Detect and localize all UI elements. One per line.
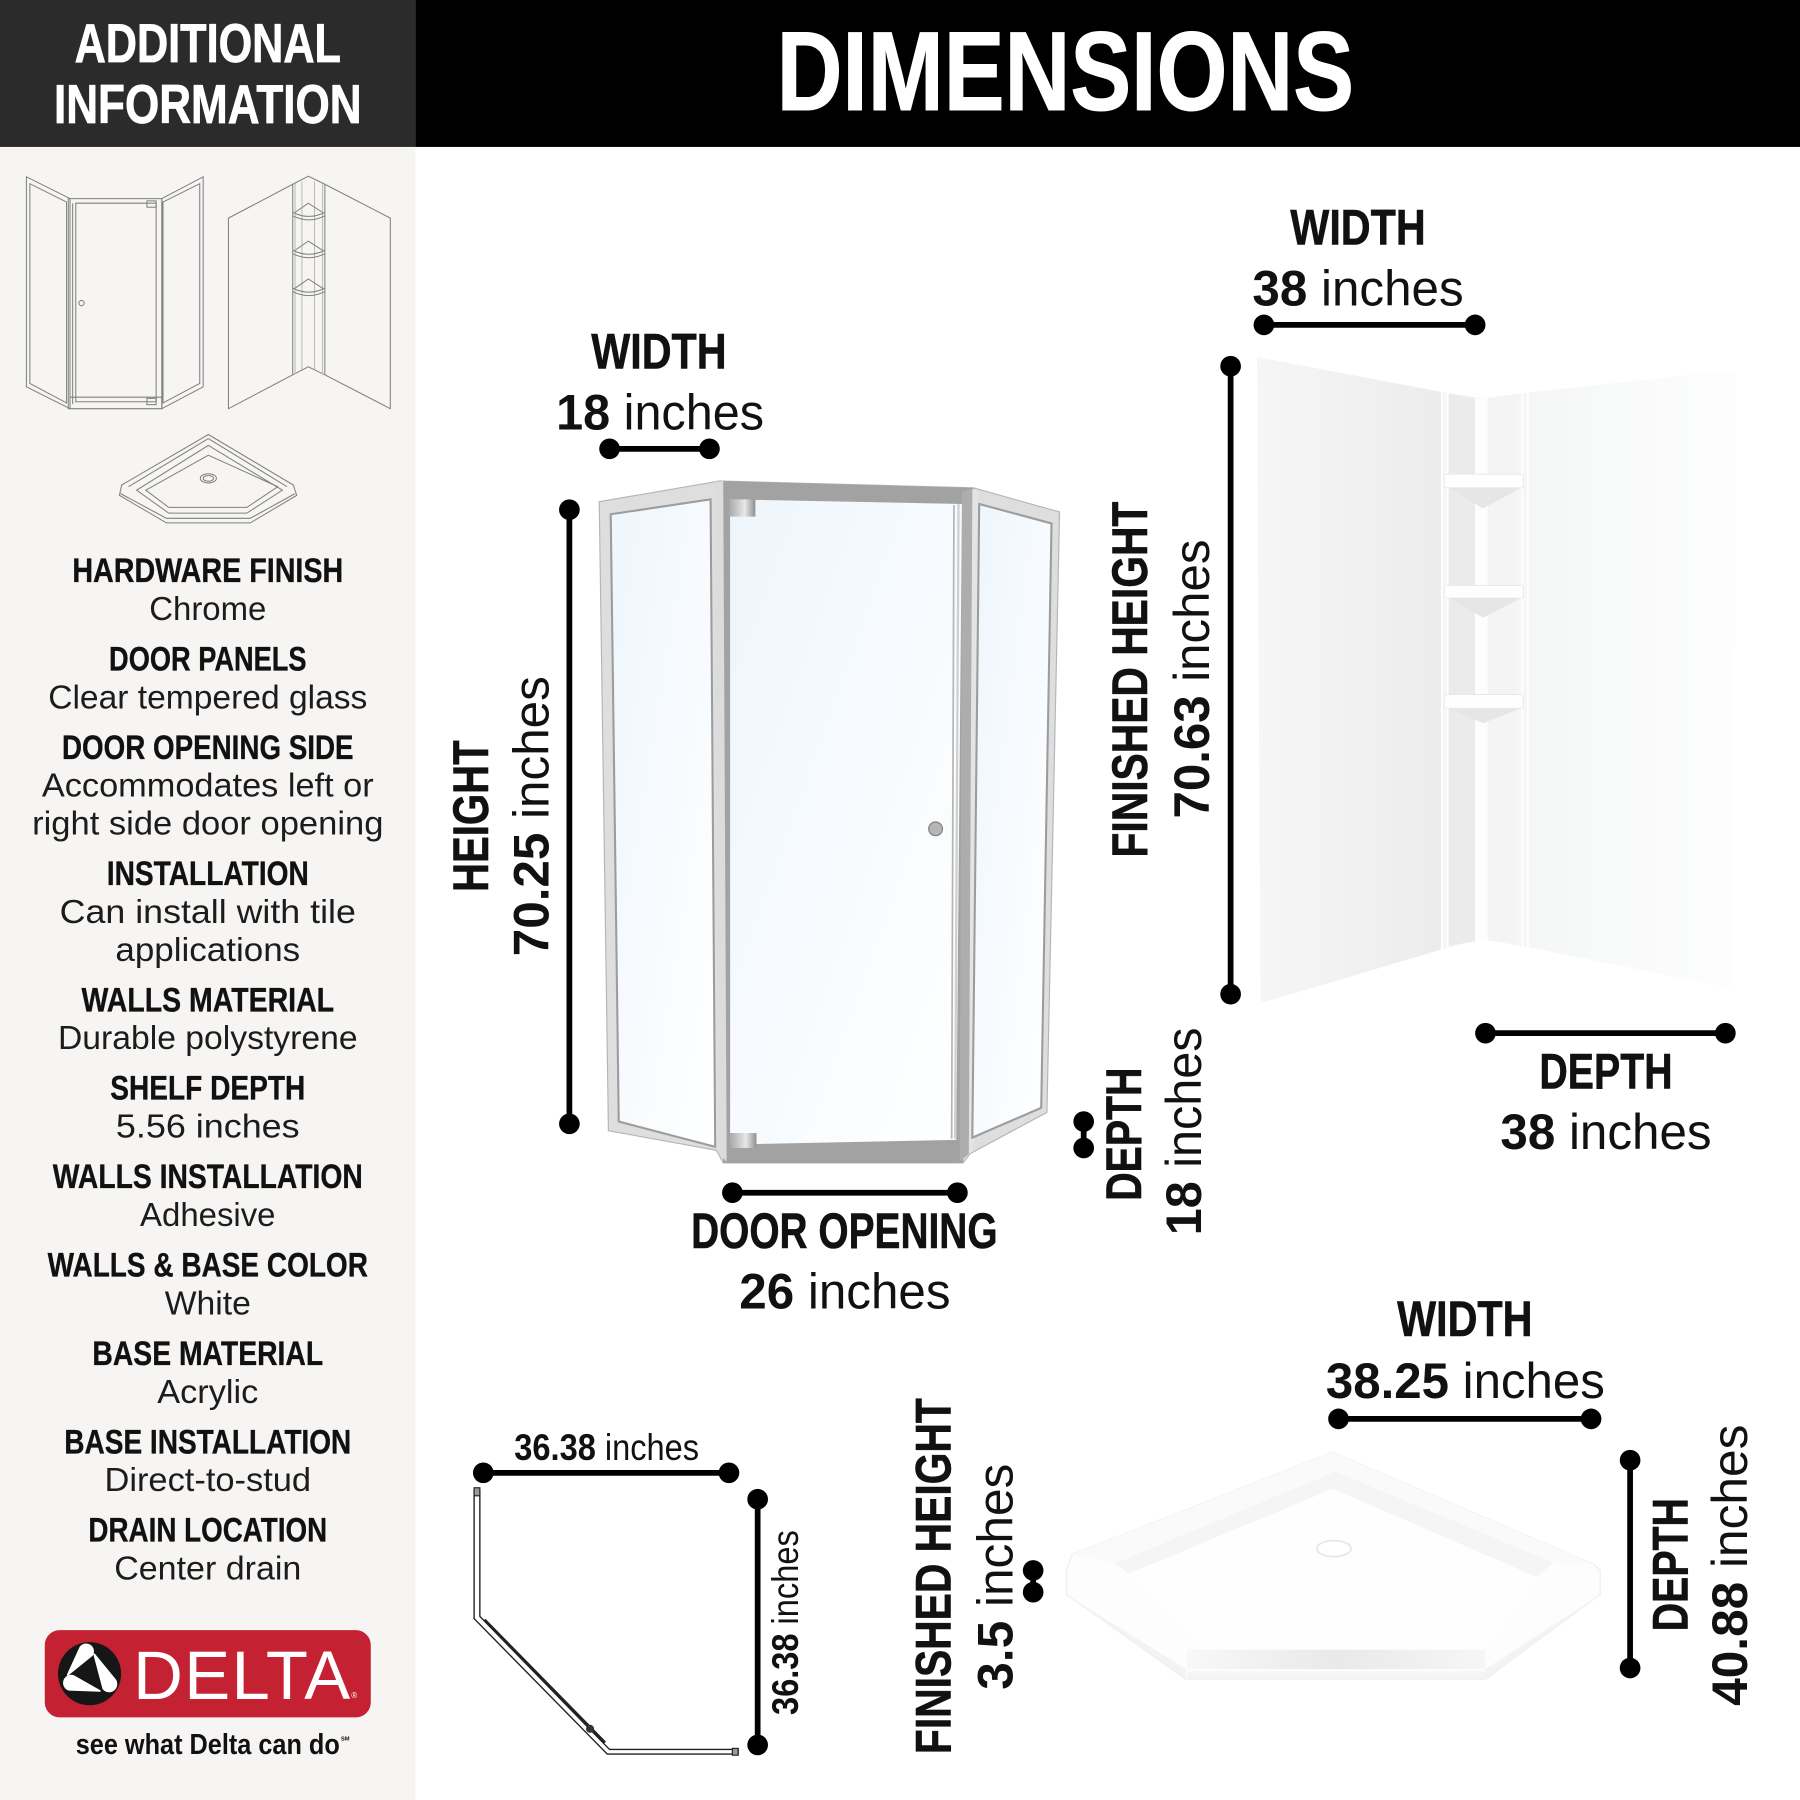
spec: walls and base color	[48, 1247, 368, 1322]
bottom hinge	[730, 1133, 757, 1148]
spec: hardware finish: HARDWARE FINISH	[72, 552, 343, 590]
left glass panel	[611, 499, 715, 1147]
walls finished height dimension	[1101, 356, 1241, 1004]
delta tagline: see what Delta can do	[76, 1729, 340, 1761]
base width dimension: WIDTH	[1397, 1290, 1533, 1347]
spec: drain location: Center drain	[114, 1551, 301, 1588]
walls depth dimension: 38 inches	[1500, 1103, 1712, 1160]
spec: base material: BASE MATERIAL	[92, 1335, 323, 1373]
base basin	[1115, 1472, 1553, 1577]
spec list	[32, 552, 383, 1588]
spec: walls and base color: WALLS & BASE COLOR	[48, 1247, 368, 1285]
product: door plan view	[474, 1488, 738, 1755]
door frame	[720, 481, 973, 1163]
base front face	[1187, 1650, 1485, 1669]
shelf 1	[1444, 474, 1523, 509]
base depth dimension: DEPTH	[1642, 1498, 1698, 1631]
delta tagline: SM	[341, 1736, 350, 1742]
header: additional information	[0, 0, 416, 147]
spec: installation	[60, 855, 356, 969]
spec: walls material	[58, 981, 358, 1057]
delta logo	[45, 1630, 371, 1717]
spec: door opening side: Accommodates left or	[42, 768, 374, 805]
spec: door panels: Clear tempered glass	[48, 679, 367, 716]
spec: shelf depth	[110, 1070, 305, 1146]
delta logo: DELTA	[133, 1637, 350, 1714]
spec: shelf depth: SHELF DEPTH	[110, 1070, 305, 1108]
door depth dimension: DEPTH	[1095, 1068, 1152, 1201]
base width dimension	[1326, 1290, 1605, 1429]
spec: walls and base color: White	[165, 1285, 251, 1322]
walls depth dimension	[1475, 1023, 1736, 1160]
spec: walls material: Durable polystyrene	[58, 1020, 358, 1057]
header: additional information: INFORMATION	[54, 73, 362, 135]
left wall	[1257, 357, 1442, 1003]
right glass panel	[972, 504, 1052, 1138]
product: shower base	[1066, 1452, 1600, 1679]
plan width dimension	[473, 1427, 739, 1483]
spec: base installation: BASE INSTALLATION	[64, 1423, 351, 1461]
spec: drain location: DRAIN LOCATION	[88, 1512, 327, 1550]
walls width dimension	[1252, 199, 1485, 335]
sidebar background panel	[0, 147, 416, 1800]
spec: base installation	[64, 1423, 351, 1499]
spec: door opening side	[32, 729, 383, 843]
line drawing: wall panels	[228, 176, 390, 409]
spec: door opening side: DOOR OPENING SIDE	[62, 729, 354, 767]
spec: installation: Can install with tile	[60, 894, 356, 931]
spec: walls installation	[53, 1158, 363, 1234]
walls finished height dimension: 70.63 inches	[1163, 540, 1220, 818]
walls depth dimension: DEPTH	[1539, 1042, 1673, 1099]
door height dimension	[442, 499, 580, 1134]
base width dimension: 38.25 inches	[1326, 1352, 1605, 1409]
header: dimensions title: DIMENSIONS	[777, 8, 1354, 134]
right wall	[1528, 370, 1737, 988]
plan depth dimension	[747, 1489, 806, 1755]
base finished height dimension: 3.5 inches	[967, 1464, 1023, 1690]
door height dimension: HEIGHT	[442, 740, 499, 892]
delta logo: ®	[351, 1691, 357, 1700]
spec: door panels: DOOR PANELS	[109, 640, 307, 678]
base finished height dimension: FINISHED HEIGHT	[905, 1398, 962, 1754]
spec: base material: Acrylic	[157, 1374, 258, 1411]
walls width dimension: WIDTH	[1290, 199, 1426, 256]
base rear rim	[1072, 1452, 1595, 1565]
base depth dimension: 40.88 inches	[1701, 1425, 1758, 1706]
door width dimension: 18 inches	[556, 383, 764, 440]
walls finished height dimension: FINISHED HEIGHT	[1101, 502, 1158, 858]
spec: walls installation: WALLS INSTALLATION	[53, 1158, 363, 1196]
spec: walls installation: Adhesive	[140, 1197, 276, 1234]
door opening dimension: 26 inches	[739, 1263, 951, 1320]
spec: walls material: WALLS MATERIAL	[82, 981, 334, 1019]
line drawing: shower base	[119, 435, 297, 523]
product: wall panels	[1257, 357, 1737, 1003]
base finished height dimension	[905, 1398, 1043, 1754]
spec: shelf depth: 5.56 inches	[116, 1109, 300, 1146]
door depth dimension: 18 inches	[1155, 1027, 1212, 1235]
spec: installation: INSTALLATION	[107, 855, 309, 893]
door opening dimension	[691, 1182, 998, 1320]
plan width dimension: 36.38 inches	[514, 1427, 699, 1468]
door width dimension: WIDTH	[591, 322, 727, 379]
shelf 3	[1444, 695, 1523, 723]
door width dimension	[556, 322, 764, 459]
top hinge	[729, 499, 755, 517]
spec: door panels	[48, 640, 367, 716]
spec: hardware finish	[72, 552, 343, 628]
line drawing: shower door	[26, 177, 203, 409]
door depth dimension	[1073, 1027, 1212, 1235]
door opening dimension: DOOR OPENING	[691, 1202, 998, 1259]
spec: installation: applications	[115, 932, 300, 969]
header: additional information: ADDITIONAL	[75, 12, 341, 74]
door height dimension: 70.25 inches	[503, 676, 560, 956]
base depth dimension	[1620, 1425, 1758, 1706]
header: dimensions title	[416, 0, 1800, 147]
spec: base material	[92, 1335, 323, 1411]
door glass	[730, 499, 962, 1145]
door knob	[929, 822, 942, 836]
spec: hardware finish: Chrome	[149, 591, 266, 628]
shelf 2	[1444, 585, 1523, 618]
plan depth dimension: 36.38 inches	[765, 1530, 806, 1715]
spec: base installation: Direct-to-stud	[104, 1462, 311, 1499]
spec: drain location	[88, 1512, 327, 1588]
center corner	[1442, 392, 1528, 949]
walls width dimension: 38 inches	[1252, 259, 1464, 316]
drain	[1317, 1541, 1351, 1557]
product: shower door	[599, 481, 1060, 1163]
spec: door opening side: right side door opening	[32, 806, 383, 843]
